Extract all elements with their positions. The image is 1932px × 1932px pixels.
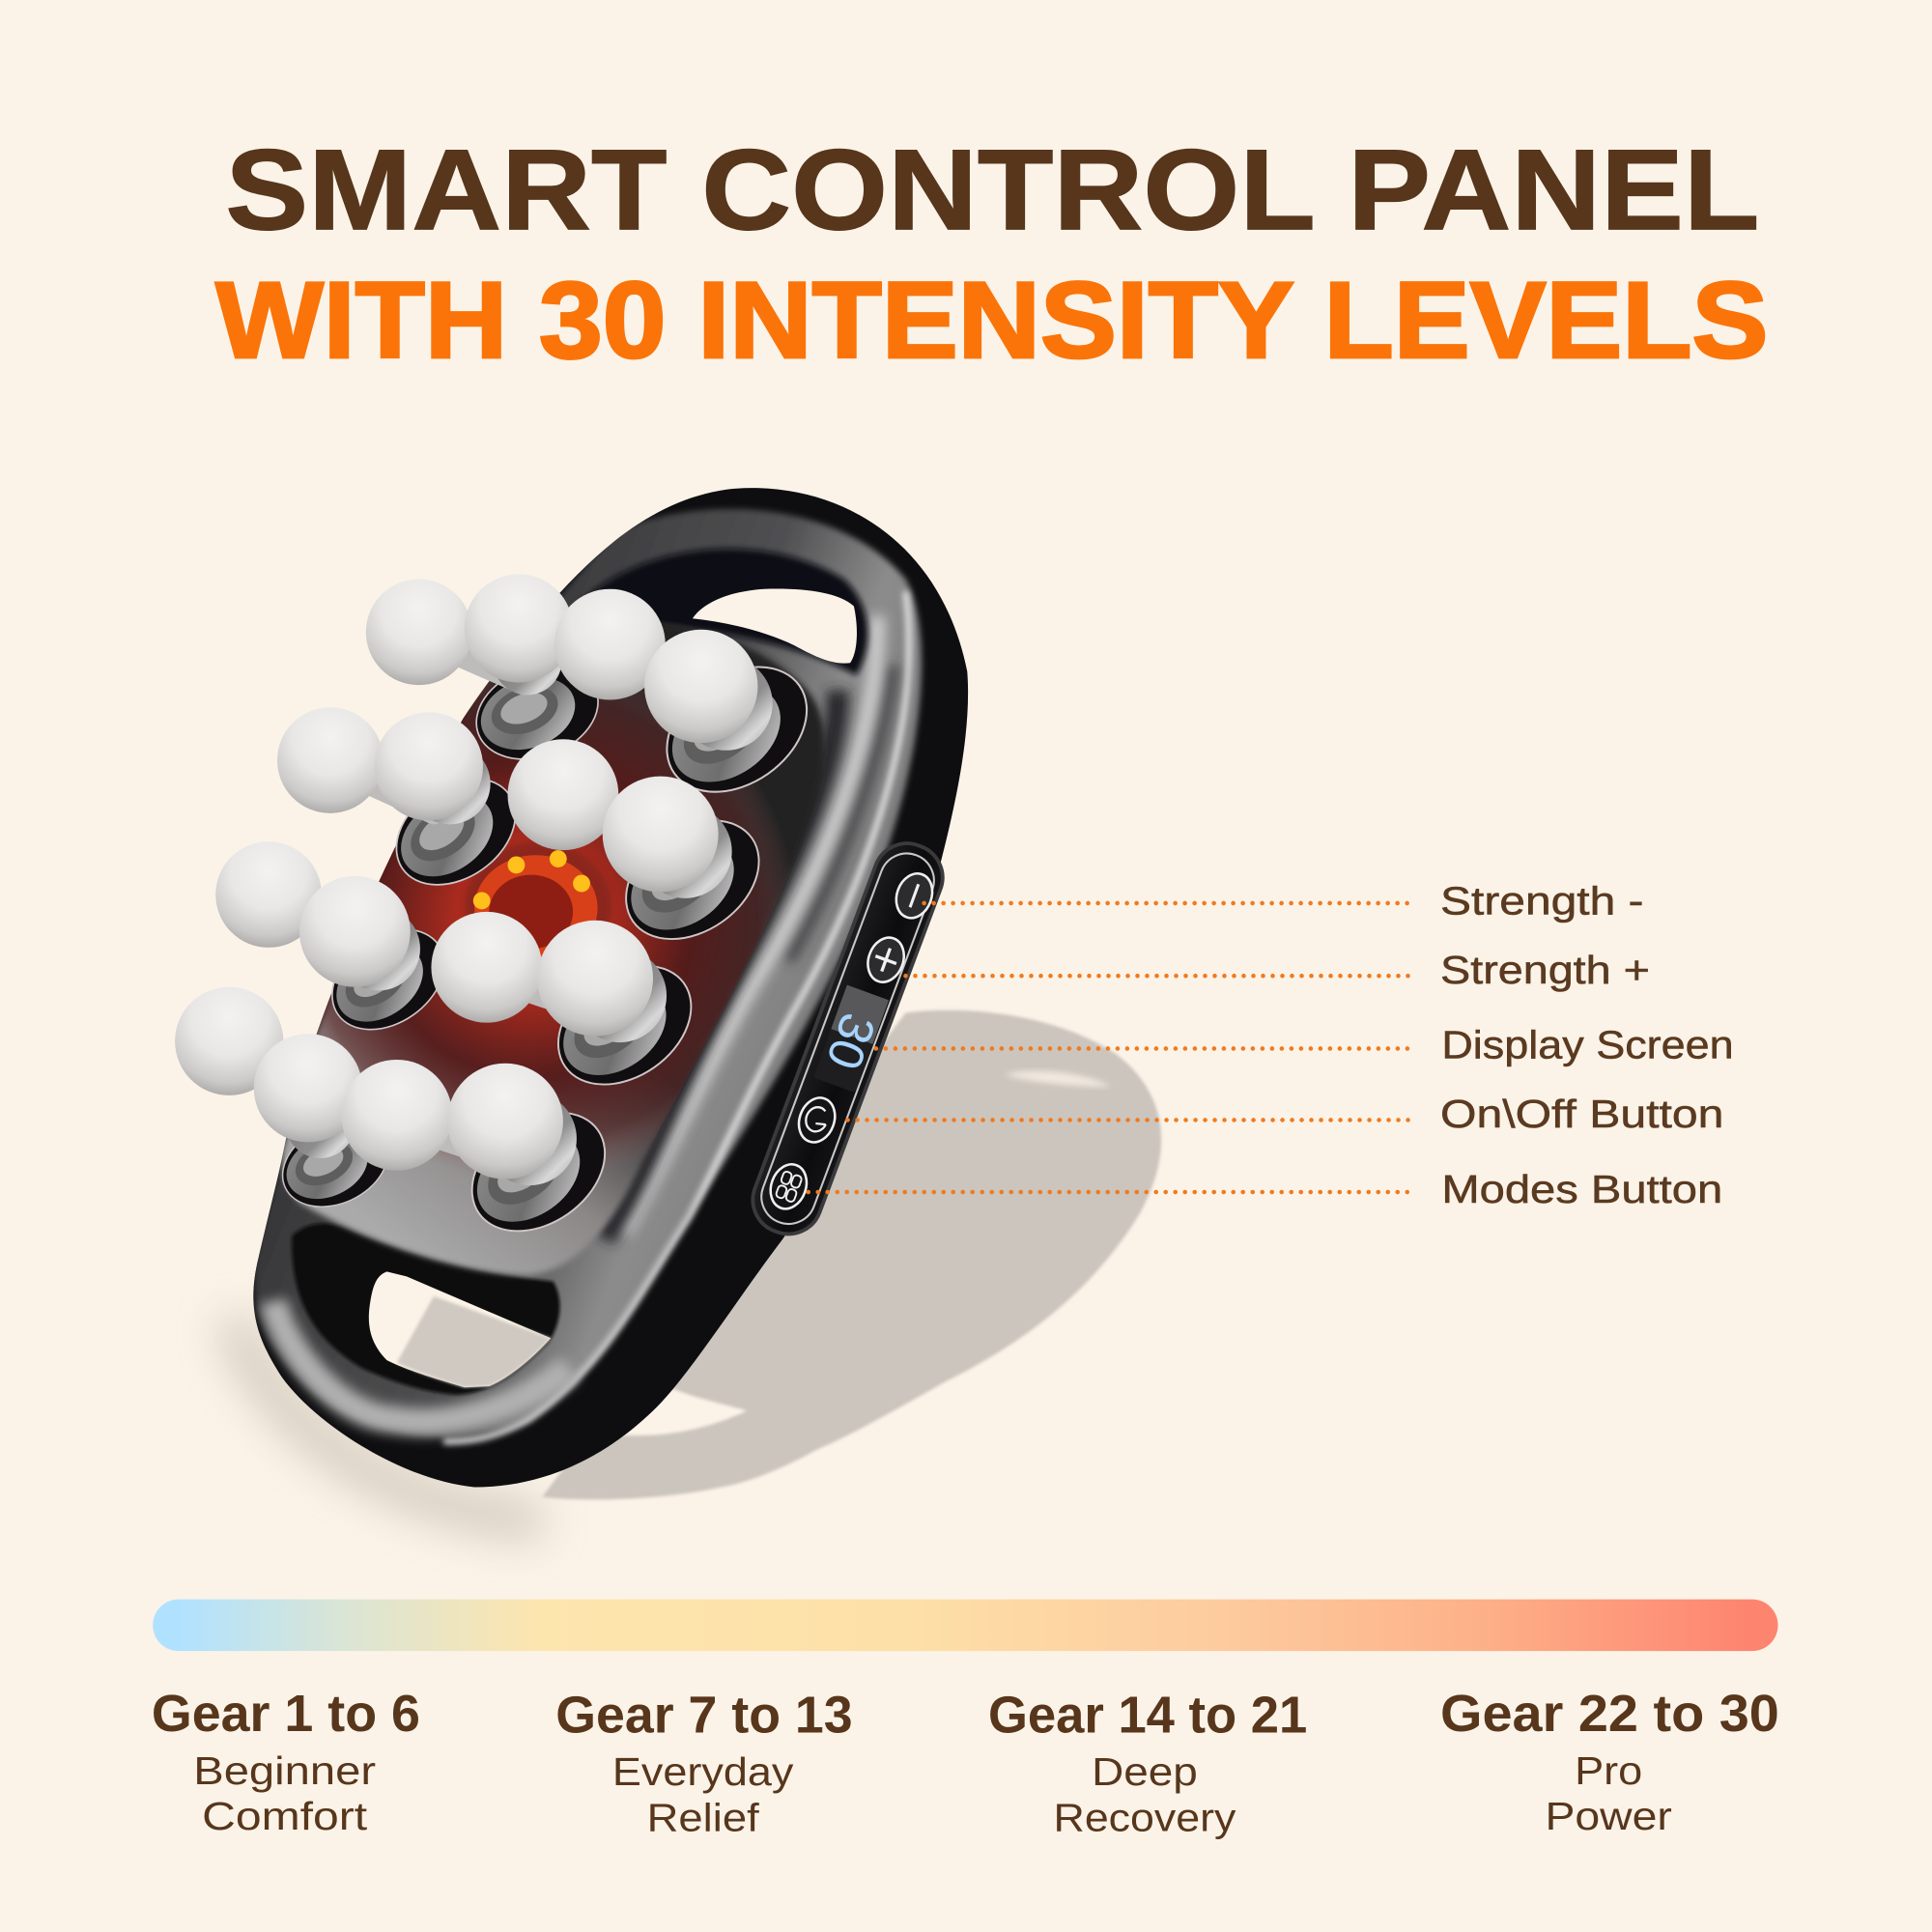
power button	[793, 1093, 841, 1148]
callout lines	[809, 903, 1412, 1192]
massage balls	[175, 574, 757, 1179]
metal frame	[254, 509, 922, 1436]
massage ball sleeves	[286, 626, 773, 1185]
callout labels: Modes Button	[1441, 1167, 1722, 1211]
massage ball stems	[241, 640, 604, 1164]
metal rail highlights	[443, 591, 909, 1441]
gear label: 22 to 30: Pro	[1575, 1748, 1642, 1793]
gear label: 7 to 13: Everyday	[612, 1749, 794, 1794]
gear label: 22 to 30: Gear 22 to 30	[1440, 1686, 1779, 1743]
control panel	[744, 834, 952, 1243]
gear label: 14 to 21	[988, 1687, 1307, 1839]
gear label: 1 to 6	[152, 1686, 420, 1838]
gear label: 7 to 13	[555, 1687, 853, 1839]
top handle opening	[579, 549, 867, 675]
face plate	[282, 619, 825, 1275]
callout labels: Strength -	[1440, 878, 1644, 923]
gear label: 7 to 13: Relief	[647, 1795, 759, 1839]
title: WITH 30 INTENSITY LEVELS	[215, 259, 1768, 381]
massager device	[175, 488, 968, 1488]
title: SMART CONTROL PANEL	[225, 127, 1759, 254]
device body	[253, 488, 968, 1488]
gear label: 14 to 21: Deep	[1092, 1749, 1198, 1794]
LED ring	[465, 841, 612, 970]
callout labels: Display Screen	[1441, 1023, 1734, 1067]
gear label: 7 to 13: Gear 7 to 13	[555, 1687, 853, 1744]
gear label: 1 to 6: Gear 1 to 6	[152, 1686, 420, 1743]
gear label: 14 to 21: Gear 14 to 21	[988, 1687, 1307, 1744]
gear label: 14 to 21: Recovery	[1054, 1795, 1236, 1839]
bottom handle opening	[292, 1223, 560, 1395]
gear label: 1 to 6: Comfort	[202, 1794, 368, 1838]
display screen: 30	[815, 1007, 886, 1077]
gear label: 1 to 6: Beginner	[193, 1748, 376, 1793]
callout labels: Strength +	[1440, 948, 1650, 992]
plus button	[862, 932, 910, 987]
gear label: 22 to 30: Power	[1545, 1794, 1672, 1838]
title	[215, 127, 1768, 381]
display screen	[810, 983, 895, 1094]
gear label: 22 to 30	[1440, 1686, 1779, 1838]
device cast shadow	[234, 1010, 1161, 1521]
callout labels	[1440, 878, 1734, 1211]
modes button	[764, 1159, 812, 1214]
red heat glow	[317, 681, 788, 1165]
massage sockets	[269, 641, 831, 1256]
intensity gradient bar	[153, 1600, 1778, 1651]
callout labels: On\Off Button	[1440, 1092, 1723, 1136]
minus button	[891, 868, 938, 923]
